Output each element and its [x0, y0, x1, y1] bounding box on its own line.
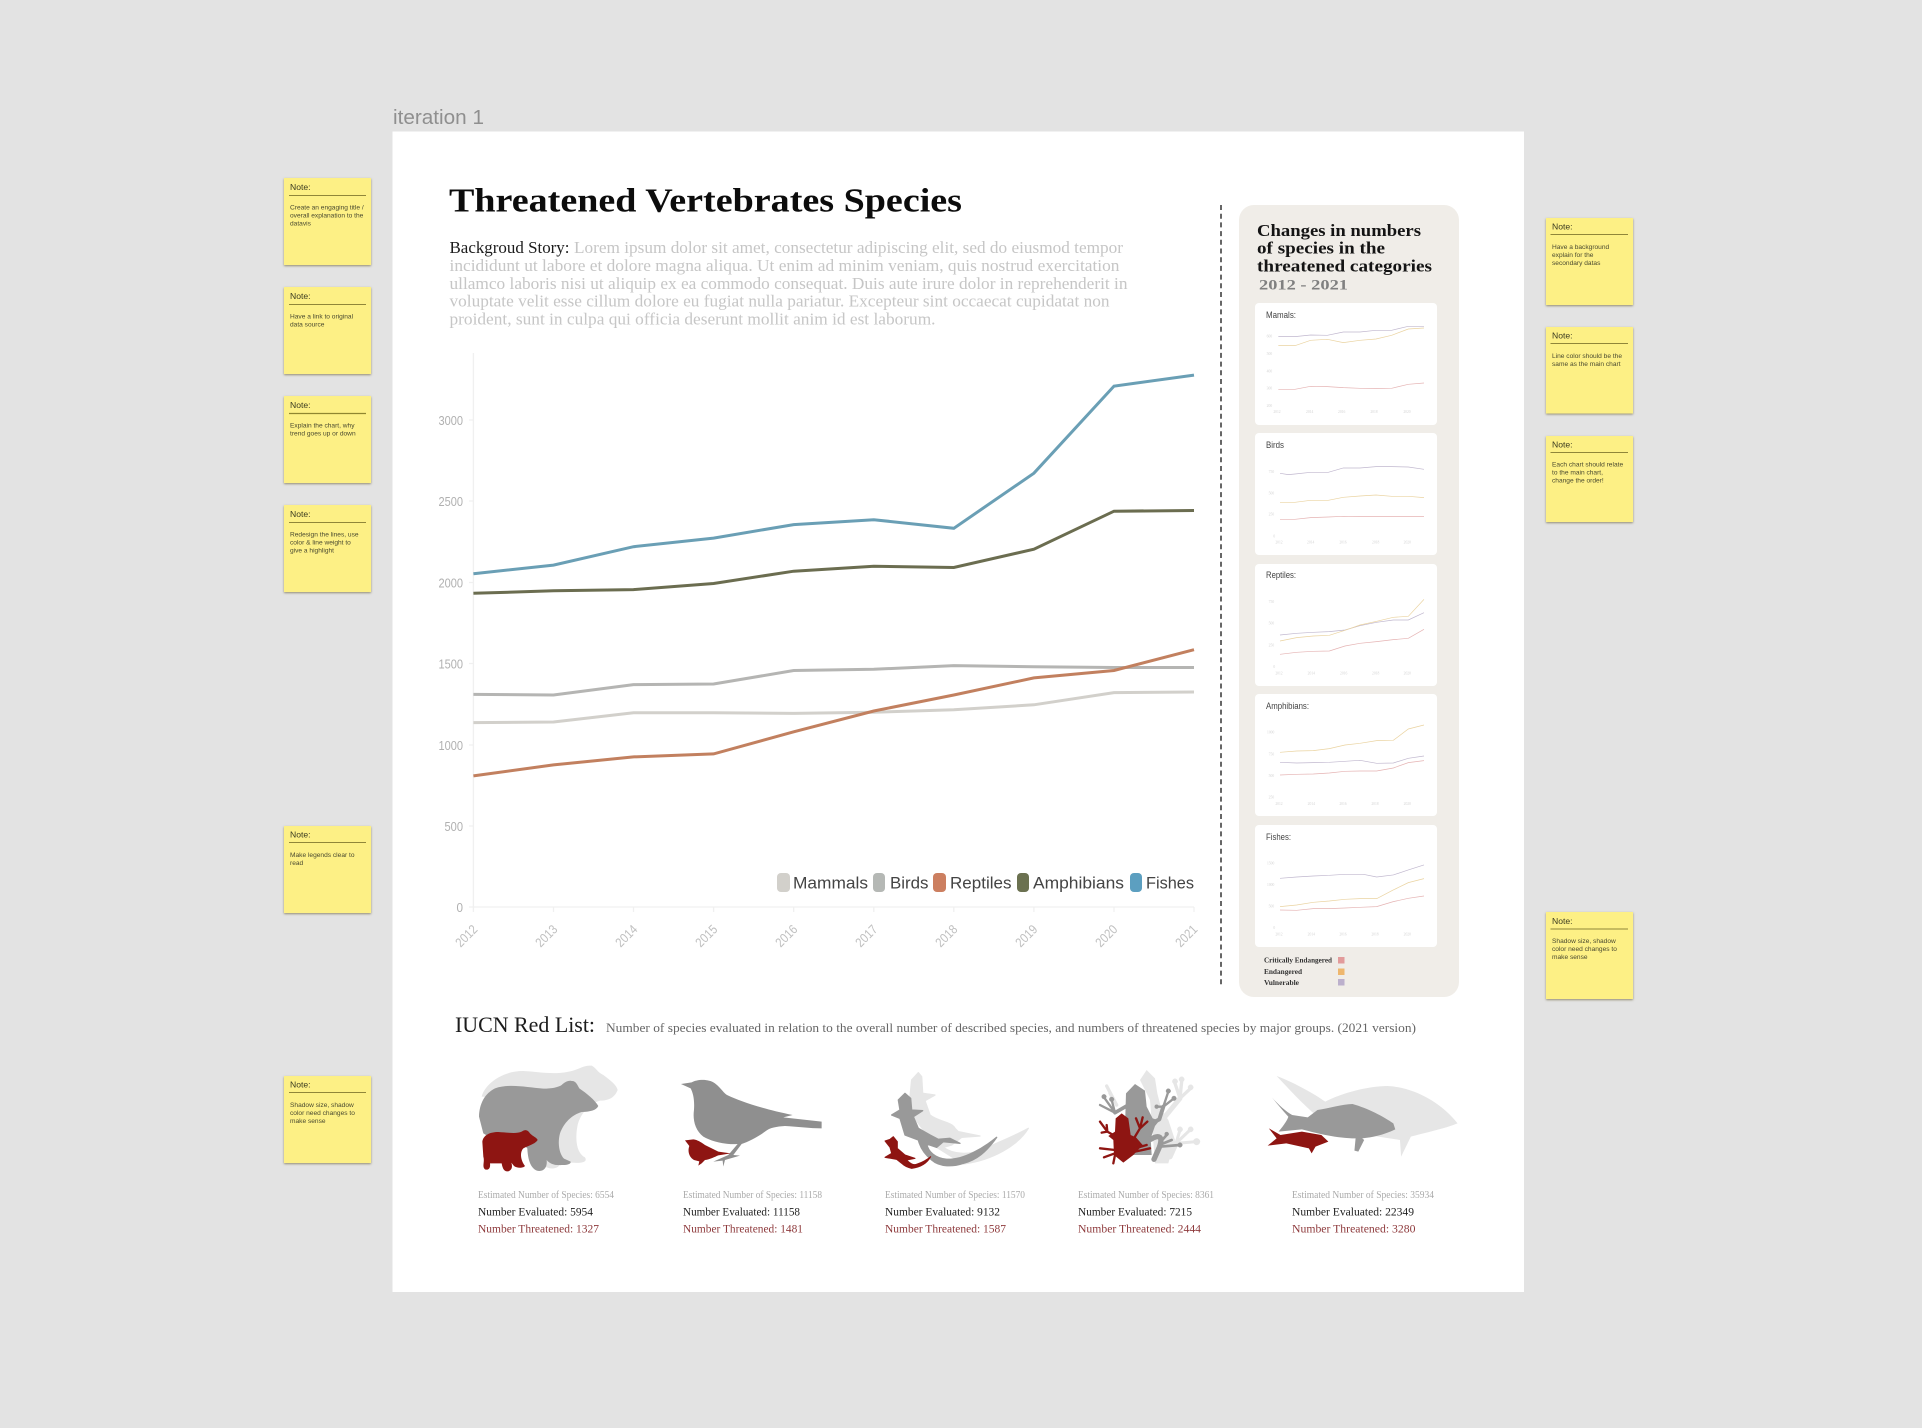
- panel heading: of species in the: [1257, 238, 1385, 258]
- text block: IUCN description: Number of species evaluated in relation to the overall number of described species, and numbers of threatened species by major groups. (2021 version): [606, 1021, 1416, 1035]
- mini chart: fishes: 2016: [1339, 932, 1347, 936]
- caption: fishes: [1292, 1190, 1434, 1236]
- x axis labels: 2015: [692, 922, 720, 950]
- panel heading: 2012 - 2021: [1259, 278, 1348, 294]
- line: amphibians: [473, 510, 1194, 593]
- caption: mammals: Number Threatened: 1327: [478, 1222, 599, 1236]
- mini chart: birds: 2016: [1339, 541, 1347, 545]
- line: birds: [473, 666, 1194, 695]
- mini chart: fishes: 2018: [1371, 932, 1379, 936]
- caption: reptiles: Number Evaluated: 9132: [885, 1204, 1000, 1218]
- x axis labels: 2020: [1092, 922, 1120, 950]
- mini chart: fishes: 2012: [1275, 932, 1283, 936]
- x axis labels: 2014: [612, 922, 640, 950]
- sticky note: chart order: Note:: [1552, 440, 1573, 450]
- text block: background story: ullamco laboris nisi ut aliquip ex ea commodo consequat. Duis aute irure dolor in reprehenderit in: [450, 274, 1128, 293]
- caption: fishes: Estimated Number of Species: 35934: [1292, 1190, 1434, 1201]
- sticky note: shadow size left: [284, 1076, 371, 1163]
- caption: amphibians: Number Threatened: 2444: [1078, 1222, 1201, 1236]
- mini chart: birds: 2020: [1404, 541, 1411, 545]
- y axis labels: 500: [444, 819, 463, 834]
- mini chart: mammals: [1255, 303, 1437, 425]
- sticky note: shadow size right: make sense: [1552, 954, 1588, 961]
- mini chart: reptiles: 2012: [1275, 671, 1283, 675]
- sticky note: engaging title: Create an engaging title /: [290, 204, 364, 212]
- sticky note: engaging title: datavis: [290, 220, 312, 228]
- x axis labels: 2012: [452, 922, 480, 950]
- x axis labels: 2018: [932, 922, 960, 950]
- sticky note: shadow size right: Note:: [1552, 916, 1573, 926]
- text block: background story: incididunt ut labore et dolore magna aliqua. Ut enim ad minim veniam, quis nostrud exercitation: [450, 256, 1120, 275]
- caption: birds: Number Evaluated: 11158: [683, 1204, 800, 1218]
- caption: fishes: Number Evaluated: 22349: [1292, 1204, 1414, 1218]
- chart legend: Fishes: [1146, 874, 1194, 892]
- panel heading: Changes in numbers: [1257, 221, 1422, 240]
- mini chart: mammals: 2018: [1370, 410, 1378, 414]
- sticky note: line color: Line color should be the: [1552, 353, 1622, 360]
- mini chart: fishes: 2020: [1404, 932, 1411, 936]
- mini chart: fishes: 1000: [1267, 883, 1274, 887]
- line: mammals: [473, 692, 1194, 723]
- dashed divider: [1220, 205, 1222, 986]
- sticky note: clear legends: read: [290, 860, 304, 867]
- y axis labels: 2500: [438, 494, 463, 509]
- mini chart: fishes: [1255, 825, 1437, 947]
- text block: background story: Lorem ipsum dolor sit amet, consectetur adipiscing elit, sed do eiusmod tempor: [574, 238, 1124, 257]
- frame label: iteration 1: iteration 1: [393, 107, 484, 129]
- chart legend: Reptiles: [950, 874, 1012, 892]
- sticky note: redesign the lines: give a highlight: [290, 548, 334, 554]
- chart legend: [777, 873, 1194, 892]
- x axis labels: 2013: [532, 922, 560, 950]
- chart legend: Mammals: [793, 874, 868, 892]
- sticky note: redesign the lines: Redesign the lines, use: [290, 532, 359, 538]
- sticky note: clear legends: Note:: [290, 830, 311, 840]
- mini chart: reptiles: 2018: [1372, 671, 1379, 675]
- mini chart: mammals: 2014: [1306, 410, 1313, 414]
- y axis labels: 3000: [438, 413, 463, 428]
- sticky note: engaging title: overall explanation to the: [290, 212, 364, 220]
- mini chart: birds: 2012: [1275, 541, 1283, 545]
- icon: bears: [479, 1066, 618, 1171]
- mini chart: fishes: 500: [1269, 904, 1274, 908]
- caption: birds: Estimated Number of Species: 11158: [683, 1190, 822, 1201]
- mini chart: amphibians: 2012: [1275, 802, 1283, 806]
- caption: birds: Number Threatened: 1481: [683, 1222, 803, 1236]
- sticky note: data source link: data source: [290, 322, 325, 328]
- text block: background story: proident, sunt in culpa qui officia deserunt mollit anim id est laborum.: [450, 310, 936, 328]
- text block: background story: [450, 238, 1128, 328]
- mini chart: reptiles: 750: [1269, 600, 1274, 604]
- mini chart: amphibians: 750: [1269, 752, 1274, 756]
- caption: reptiles: [885, 1190, 1025, 1236]
- chart legend: Amphibians: [1033, 874, 1124, 892]
- caption: amphibians: Estimated Number of Species: 8361: [1078, 1190, 1214, 1201]
- mini chart: amphibians: 2016: [1339, 802, 1347, 806]
- mini chart: amphibians: Amphibians:: [1266, 701, 1309, 711]
- sticky note: chart order: Each chart should relate: [1552, 462, 1623, 468]
- panel heading: threatened categories: [1257, 256, 1433, 276]
- mini chart: reptiles: 500: [1269, 622, 1274, 626]
- y axis labels: 1000: [438, 738, 463, 753]
- caption: mammals: Estimated Number of Species: 6554: [478, 1190, 614, 1201]
- sticky note: line color: same as the main chart: [1552, 361, 1621, 368]
- icon: fishes: [1268, 1076, 1458, 1157]
- mini chart: reptiles: 0: [1273, 665, 1275, 669]
- mini chart: mammals: 400: [1267, 369, 1272, 373]
- mini chart: fishes: Fishes:: [1266, 832, 1291, 842]
- category legend: Endangered: [1264, 967, 1303, 976]
- sticky note: redesign the lines: [284, 505, 371, 592]
- sticky note: redesign the lines: Note:: [290, 509, 311, 519]
- sticky note: chart order: change the order!: [1552, 478, 1604, 484]
- mini chart: mammals: Mamals:: [1266, 310, 1296, 320]
- caption: fishes: Number Threatened: 3280: [1292, 1222, 1416, 1236]
- mini chart: birds: 500: [1269, 491, 1274, 495]
- mini chart: amphibians: 500: [1269, 774, 1274, 778]
- sticky note: background for secondary data: Have a background: [1552, 244, 1610, 251]
- sticky note: shadow size left: color need changes to: [290, 1110, 355, 1117]
- sticky note: explain the chart: [284, 396, 371, 483]
- sticky note: line color: [1546, 327, 1633, 414]
- sticky note: shadow size left: Shadow size, shadow: [290, 1102, 354, 1109]
- mini chart: reptiles: [1255, 564, 1437, 686]
- mini chart: birds: 0: [1273, 534, 1275, 538]
- icon: reptiles: [885, 1073, 1028, 1168]
- x axis labels: 2016: [772, 922, 800, 950]
- mini chart: amphibians: [1255, 694, 1437, 816]
- caption: amphibians: Number Evaluated: 7215: [1078, 1204, 1192, 1218]
- mini chart: mammals: 2016: [1338, 410, 1345, 414]
- mini chart: birds: 2014: [1307, 541, 1314, 545]
- icon: amphibians: [1100, 1070, 1200, 1163]
- heading: IUCN Red List: IUCN Red List:: [455, 1012, 595, 1037]
- caption: mammals: Number Evaluated: 5954: [478, 1204, 593, 1218]
- title: Threatened Vertebrates Species: [449, 182, 962, 220]
- sticky note: explain the chart: trend goes up or down: [290, 430, 356, 438]
- sticky note: chart order: to the main chart,: [1552, 470, 1603, 476]
- mini chart: fishes: 2014: [1308, 932, 1315, 936]
- x axis labels: 2021: [1172, 922, 1200, 950]
- sticky note: shadow size left: make sense: [290, 1118, 326, 1125]
- caption: amphibians: [1078, 1190, 1214, 1236]
- category legend: Vulnerable: [1264, 978, 1300, 987]
- mini chart: mammals: 2020: [1403, 410, 1411, 414]
- sticky note: data source link: [284, 287, 371, 374]
- x axis labels: [452, 922, 1200, 950]
- mini chart: mammals: 2012: [1273, 410, 1281, 414]
- x axis labels: 2017: [852, 922, 880, 950]
- sticky note: shadow size right: color need changes to: [1552, 946, 1617, 953]
- chart legend: Birds: [890, 874, 928, 892]
- panel heading: [1257, 221, 1433, 294]
- mini chart: amphibians: 2020: [1404, 802, 1411, 806]
- panel: white artboard: [392, 132, 1524, 1292]
- sticky note: engaging title: Note:: [290, 182, 311, 192]
- y axis labels: 1500: [438, 656, 463, 672]
- y axis labels: 0: [456, 900, 463, 915]
- mini chart: birds: [1255, 433, 1437, 555]
- mini chart: birds: 750: [1269, 470, 1274, 474]
- sticky note: engaging title: [284, 178, 371, 265]
- category legend: [1264, 956, 1344, 987]
- caption: reptiles: Estimated Number of Species: 11570: [885, 1190, 1025, 1201]
- sticky note: explain the chart: Explain the chart, why: [290, 422, 355, 430]
- y axis labels: [438, 413, 463, 915]
- mini chart: reptiles: 2014: [1308, 671, 1315, 675]
- sticky note: shadow size left: Note:: [290, 1080, 311, 1090]
- mini chart: mammals: 200: [1267, 404, 1272, 408]
- mini chart: reptiles: 2016: [1340, 671, 1347, 675]
- y axis labels: 2000: [438, 576, 463, 590]
- icon: birds: [681, 1080, 822, 1167]
- sticky note: chart order: [1546, 436, 1633, 522]
- sticky note: shadow size right: Shadow size, shadow: [1552, 938, 1616, 945]
- mini chart: fishes: 0: [1273, 926, 1275, 930]
- mini chart: reptiles: Reptiles:: [1266, 570, 1296, 580]
- sticky note: background for secondary data: secondary datas: [1552, 260, 1601, 267]
- panel: secondary charts: [1239, 205, 1459, 997]
- category legend: Critically Endangered: [1264, 956, 1333, 964]
- x axis labels: 2019: [1012, 922, 1040, 950]
- mini chart: reptiles: 2020: [1404, 671, 1411, 675]
- caption: mammals: [478, 1190, 614, 1236]
- line: reptiles: [473, 650, 1194, 776]
- mini chart: mammals: 600: [1267, 335, 1272, 339]
- text block: background story: voluptate velit esse cillum dolore eu fugiat nulla pariatur. Excepteur sint occaecat cupidatat non: [450, 292, 1110, 310]
- sticky note: explain the chart: Note:: [290, 400, 311, 410]
- text block: background story: Backgroud Story:: [450, 238, 570, 257]
- mini chart: amphibians: 2018: [1371, 802, 1379, 806]
- sticky note: clear legends: [284, 826, 371, 913]
- mini chart: birds: Birds: [1266, 440, 1284, 450]
- mini chart: mammals: 500: [1267, 352, 1272, 356]
- mini chart: mammals: 300: [1267, 386, 1272, 390]
- sticky note: data source link: Note:: [290, 291, 311, 301]
- mini chart: amphibians: 2014: [1308, 802, 1315, 806]
- mini chart: birds: 2018: [1372, 541, 1379, 545]
- caption: birds: [683, 1190, 822, 1236]
- sticky note: background for secondary data: explain for the: [1552, 252, 1594, 259]
- mini chart: amphibians: 250: [1269, 796, 1274, 800]
- sticky note: background for secondary data: Note:: [1552, 222, 1573, 232]
- sticky note: redesign the lines: color & line weight to: [290, 540, 351, 546]
- mini chart: amphibians: 1000: [1267, 731, 1274, 735]
- main line chart: [438, 353, 1200, 950]
- mini chart: fishes: 1500: [1267, 861, 1274, 865]
- caption: reptiles: Number Threatened: 1587: [885, 1222, 1006, 1236]
- sticky note: line color: Note:: [1552, 330, 1573, 340]
- line: fishes: [473, 375, 1194, 574]
- mini chart: reptiles: 250: [1269, 643, 1274, 647]
- sticky note: clear legends: Make legends clear to: [290, 852, 355, 859]
- mini chart: birds: 250: [1269, 513, 1274, 517]
- sticky note: background for secondary data: [1546, 218, 1633, 305]
- sticky note: data source link: Have a link to original: [290, 314, 354, 320]
- sticky note: shadow size right: [1546, 912, 1633, 999]
